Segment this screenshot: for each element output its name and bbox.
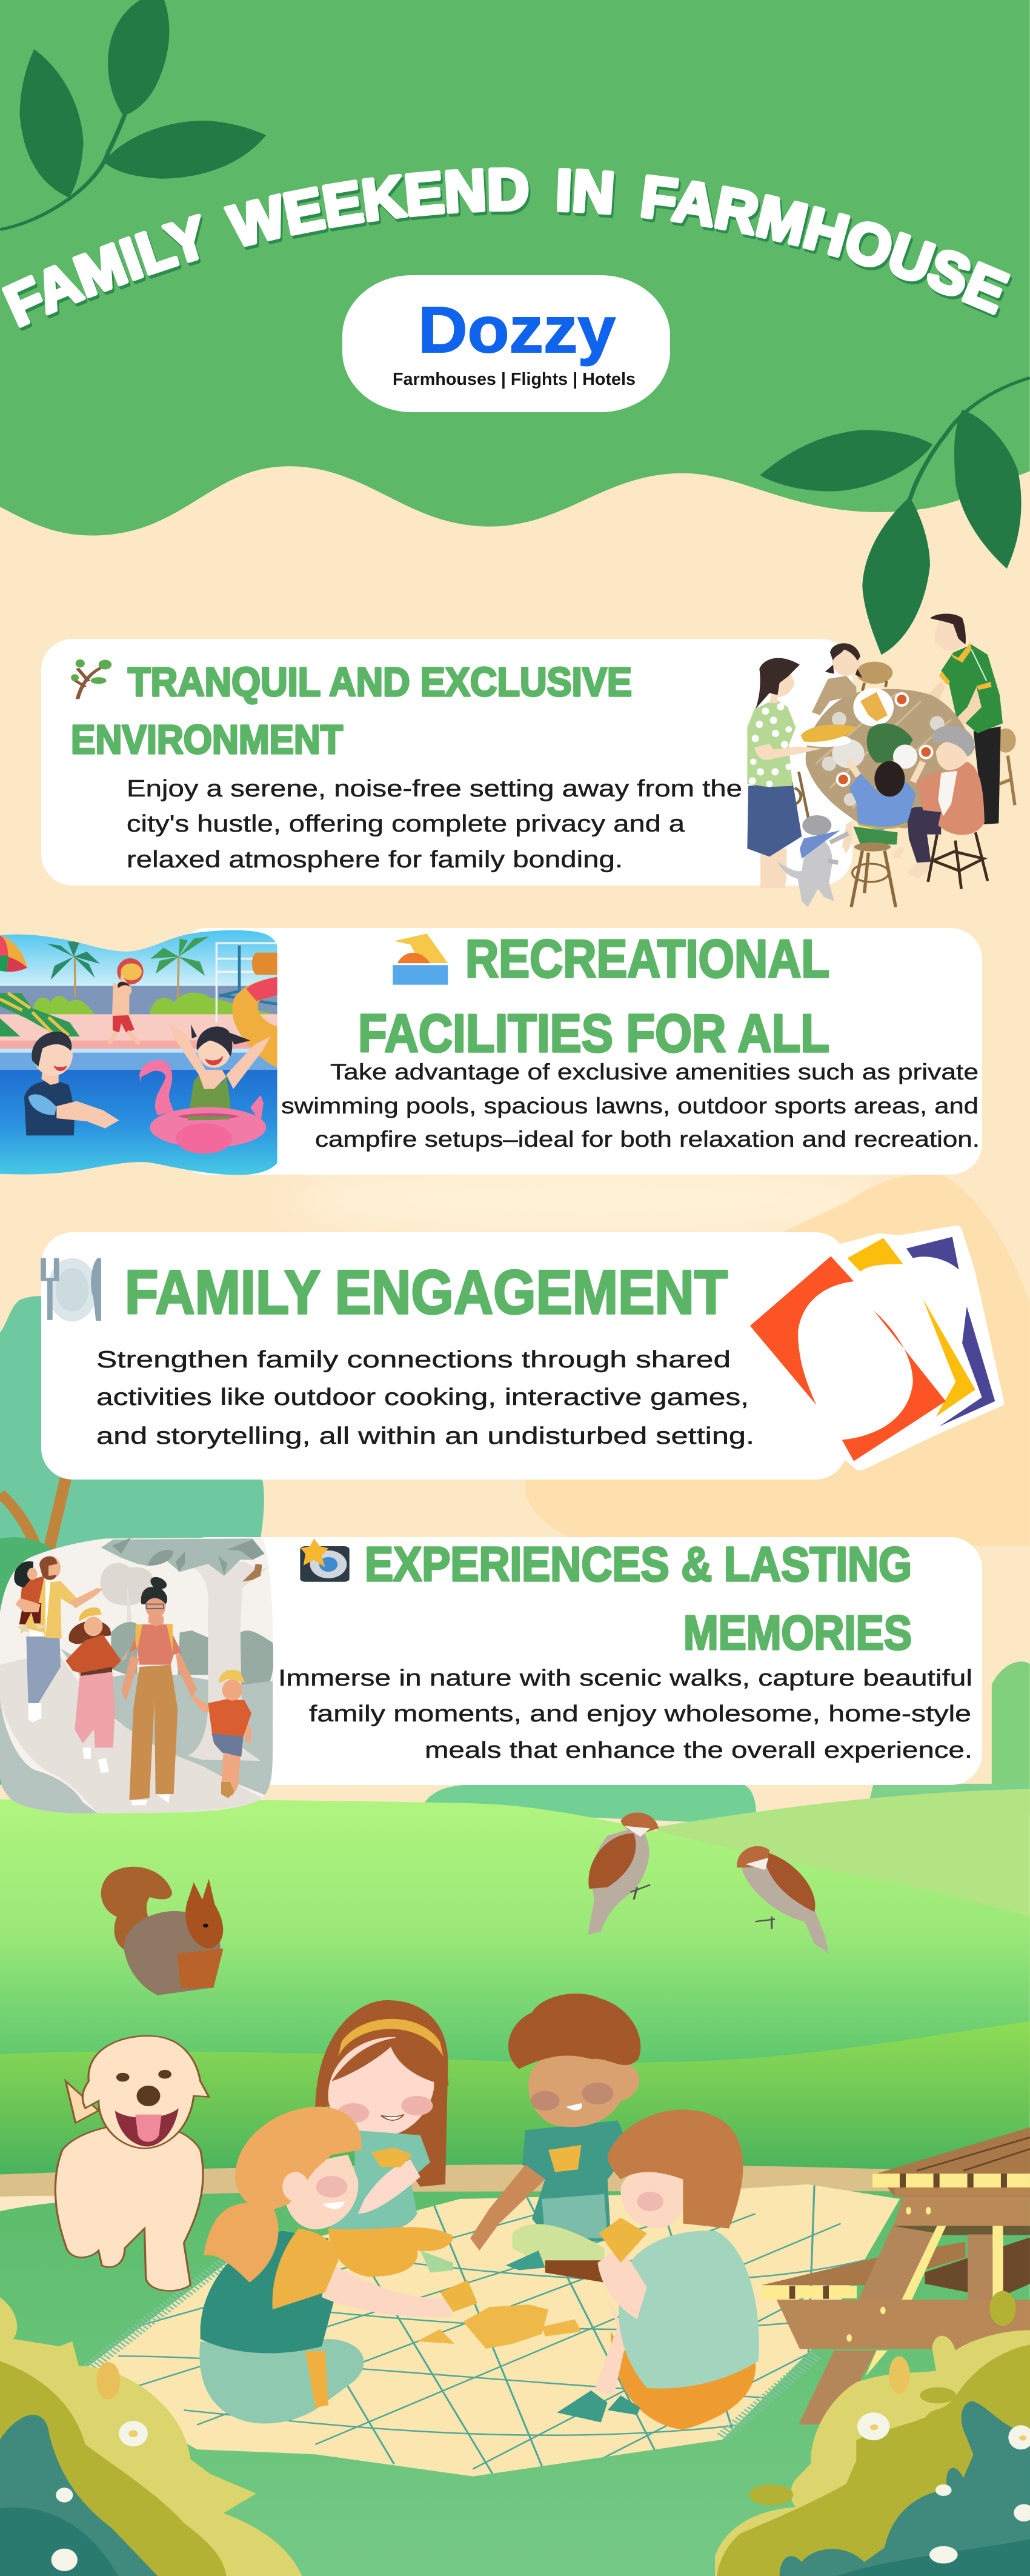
grandmother: [907, 726, 985, 879]
bird on branch: [242, 1564, 262, 1581]
foreground grass: [0, 2191, 1030, 2576]
girl in flamingo float: [139, 1024, 271, 1153]
header: green wavy banner: [0, 0, 1030, 536]
man in green shirt: [913, 613, 1003, 824]
pile of cards: [417, 2304, 581, 2349]
body text: and storytelling, all within an undisturbed setting.: [96, 1423, 754, 1449]
food plates and bowls: [822, 688, 945, 806]
body text: [281, 1059, 980, 1152]
body text: city's hustle, offering complete privacy and a: [127, 811, 685, 837]
near dark green hills: [0, 2021, 1030, 2189]
ground: beige path: [0, 1657, 262, 1814]
dog: [55, 2036, 209, 2291]
boy in water: [24, 1032, 119, 1135]
icon: leaf branch, right: [760, 378, 1030, 655]
sparrow, left: [588, 1812, 659, 1935]
mother in tan trousers: [121, 1577, 197, 1805]
picnic table: [762, 2127, 1030, 2424]
ground: sage grass: [0, 1649, 273, 1814]
sky: [0, 929, 277, 988]
panel: recreational facilities for all: [176, 928, 982, 1175]
water slide: [232, 953, 277, 1068]
poolside: [0, 1014, 277, 1041]
heading: RECREATIONAL: [465, 929, 829, 989]
big tree: [182, 1562, 271, 1761]
wall: [0, 986, 277, 1015]
boy with orange shorts, front: [557, 2110, 759, 2430]
table top: [877, 2127, 1030, 2197]
table: [806, 689, 975, 829]
picnic blanket: [65, 2184, 920, 2477]
body text: Strengthen family connections through shared: [96, 1347, 731, 1373]
heading: FAMILY ENGAGEMENT: [125, 1258, 728, 1327]
shrubs: [111, 1622, 274, 1691]
icon: camera with flash: [300, 1538, 350, 1582]
illustration: family walking in nature: [0, 1535, 277, 1818]
body text: [127, 776, 742, 873]
panel: tranquil and exclusive environment: [41, 639, 852, 886]
heading: EXPERIENCES & LASTING: [365, 1537, 912, 1591]
bench and frame: [925, 2237, 1030, 2298]
palm trees: [47, 936, 209, 1000]
squirrel: [101, 1867, 224, 1995]
heading: TRANQUIL AND EXCLUSIVE: [128, 659, 632, 705]
logo badge: Dozzy: Farmhouses | Flights | Hotels: [393, 370, 636, 389]
icon: leaf branch, top left: [0, 0, 266, 230]
sun lounger: [0, 993, 80, 1036]
dog on hind legs: [777, 815, 848, 907]
logo badge: Dozzy: Dozzy: [418, 293, 616, 366]
pool wall: [0, 1052, 277, 1070]
heading: [365, 1537, 912, 1660]
stool, front: [851, 843, 895, 907]
illustration: family at the table: [747, 613, 1016, 907]
body text: Enjoy a serene, noise-free setting away from the: [127, 776, 742, 802]
body text: Immerse in nature with scenic walks, capture beautiful: [278, 1666, 972, 1691]
woman in floral blouse: [747, 658, 856, 888]
stools: [795, 662, 1016, 820]
sparrow, right: [737, 1846, 829, 1954]
girl with long brown hair: [315, 2000, 453, 2277]
backdrop: [0, 1535, 277, 1818]
background scenery: trees and soft hills: [0, 1162, 1030, 1825]
panel: family engagement: [41, 1232, 847, 1480]
heading: ENVIRONMENT: [71, 717, 343, 762]
boy with curly hair: [470, 1994, 640, 2283]
bush, bottom right: [715, 2291, 1030, 2576]
body text: Take advantage of exclusive amenities such as private: [330, 1059, 978, 1084]
girl with blonde pigtails, front: [199, 2107, 477, 2424]
small background tree: [101, 1563, 153, 1606]
bottom scene: picnic on green hills: [0, 1789, 1030, 2576]
tan path: [0, 2164, 1030, 2199]
father carrying child: [14, 1556, 103, 1723]
stool, right: [928, 832, 988, 889]
body text: [278, 1666, 972, 1763]
umbrella: [0, 935, 27, 972]
body text: [96, 1347, 754, 1449]
main light green hill: [0, 1800, 1030, 2111]
body text: campfire setups–ideal for both relaxation and recreation.: [315, 1127, 980, 1152]
water: [0, 1070, 277, 1177]
bushes: [32, 992, 277, 1014]
boy seen from behind: [842, 759, 923, 859]
bush, bottom left: [0, 2297, 302, 2576]
body text: activities like outdoor cooking, interactive games,: [96, 1384, 749, 1410]
body text: family moments, and enjoy wholesome, home-style: [309, 1701, 971, 1727]
girl in pink trousers: [65, 1607, 129, 1773]
logo badge: Dozzy: [342, 275, 670, 412]
illustration: hand of playing cards: [750, 1229, 998, 1467]
body text: meals that enhance the overall experience.: [425, 1738, 972, 1763]
icon: fork, plate and knife: [44, 1258, 101, 1321]
illustration: kids at the pool: [0, 929, 277, 1177]
girl at the back: [812, 643, 862, 715]
body text: swimming pools, spacious lawns, outdoor sports areas, and: [281, 1093, 978, 1118]
boy in yellow cap: [191, 1670, 251, 1798]
heading: FACILITIES FOR ALL: [358, 1003, 829, 1063]
heading: [358, 929, 829, 1063]
boy with ball: [109, 958, 144, 1044]
icon: swimmer: [393, 933, 448, 985]
body text: relaxed atmosphere for family bonding.: [127, 847, 623, 873]
far hill, right: [657, 1789, 1030, 2003]
lifeguard tower: [216, 943, 277, 1023]
heading: MEMORIES: [683, 1606, 912, 1660]
title: Family Weekend in Farmhouse: FAMILY WEEKEND IN FARMHOUSE: [2, 167, 1012, 331]
panel: experiences and lasting memories: [176, 1537, 982, 1785]
heading: [71, 659, 632, 762]
icon: herb sprig: [71, 659, 111, 699]
